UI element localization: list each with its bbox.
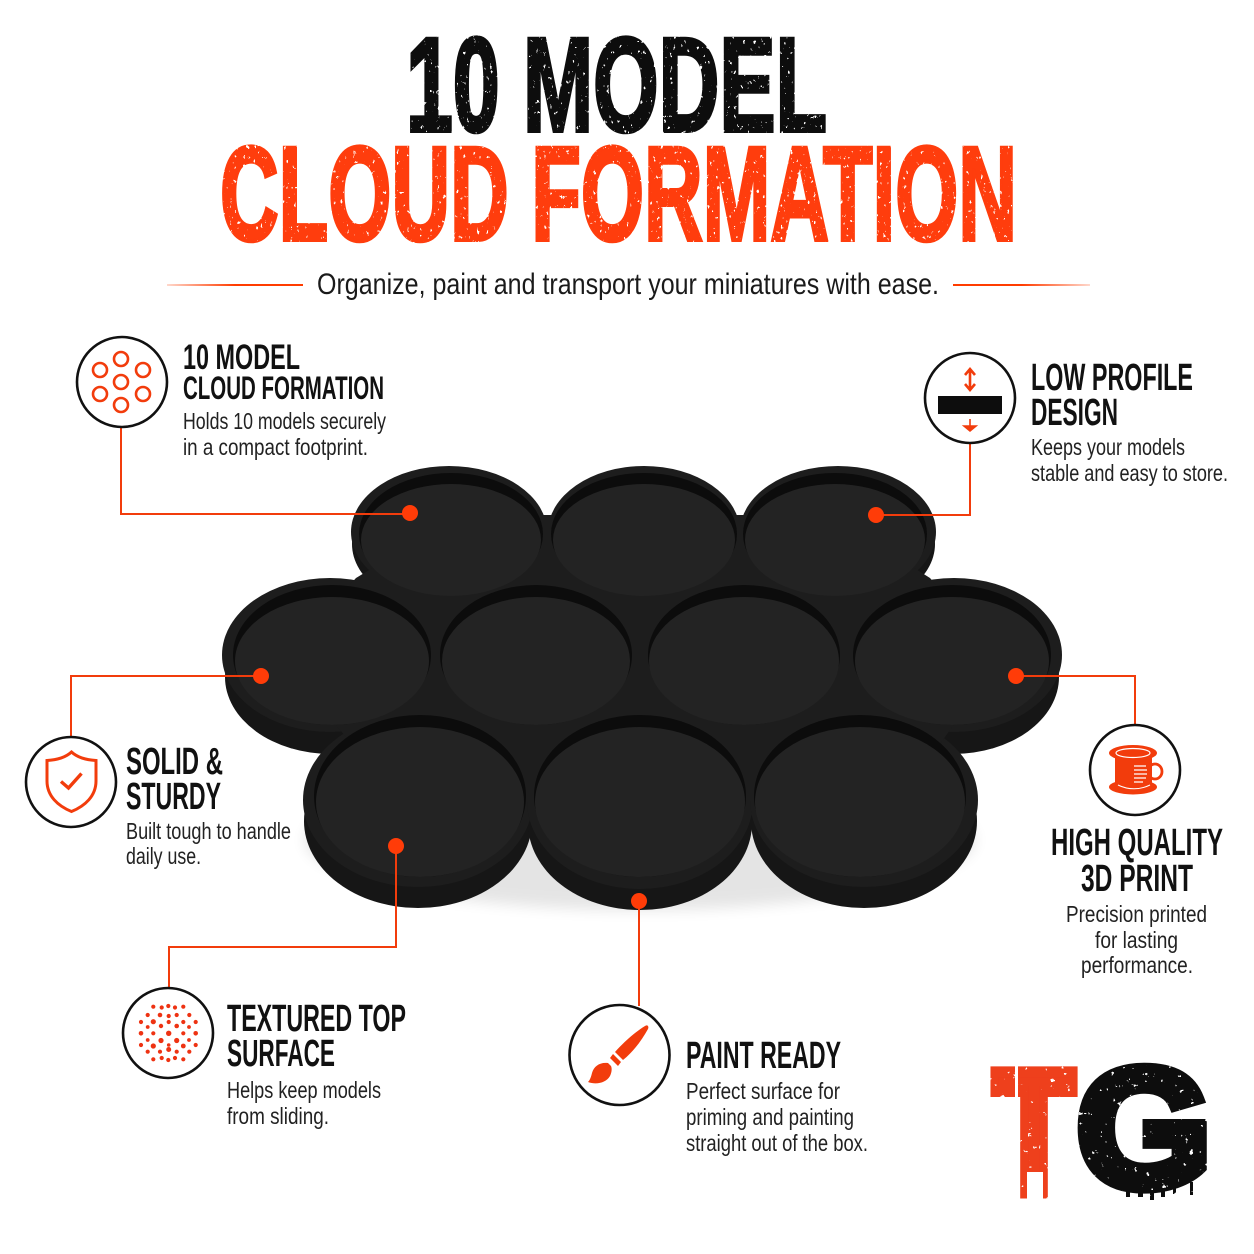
logo letter G: G xyxy=(1077,1035,1211,1222)
description: priming and painting xyxy=(686,1104,854,1130)
description xyxy=(227,1077,381,1129)
feature: 10 model cloud formation xyxy=(77,337,386,460)
heading xyxy=(1031,357,1193,434)
icon: shield with check xyxy=(26,737,116,827)
textured floors xyxy=(235,484,1049,877)
logo letter T: T xyxy=(993,1034,1075,1231)
callout lines and dots xyxy=(71,428,1135,1006)
description: straight out of the box. xyxy=(686,1130,868,1156)
heading: TEXTURED TOP xyxy=(227,998,406,1040)
heading xyxy=(183,338,384,406)
tray side walls xyxy=(225,478,1059,910)
description: Built tough to handle xyxy=(126,818,291,844)
heading: DESIGN xyxy=(1031,392,1118,434)
heading: PAINT READY xyxy=(686,1035,841,1077)
heading: SURFACE xyxy=(227,1033,335,1075)
description: Helps keep models xyxy=(227,1077,381,1103)
heading xyxy=(227,998,406,1075)
icon: ten rings xyxy=(77,337,167,427)
icon: dot texture xyxy=(123,988,213,1078)
feature: paint ready xyxy=(570,1005,868,1156)
description: in a compact footprint. xyxy=(183,434,368,460)
description xyxy=(1066,901,1207,978)
logo: TG xyxy=(993,1034,1211,1231)
heading: 3D PRINT xyxy=(1081,858,1193,900)
feature: textured top surface xyxy=(123,988,406,1129)
icon: filament spool xyxy=(1090,725,1180,815)
subtitle: Organize, paint and transport your miniatures with ease. xyxy=(317,268,939,301)
description: Keeps your models xyxy=(1031,434,1185,460)
description: Perfect surface for xyxy=(686,1078,840,1104)
heading xyxy=(126,741,223,818)
tray top surface xyxy=(222,466,1062,889)
heading: 10 MODEL xyxy=(183,338,300,377)
heading: SOLID & xyxy=(126,741,223,783)
icon: paint brush xyxy=(570,1005,670,1105)
description xyxy=(126,818,291,869)
feature: solid and sturdy xyxy=(26,737,291,869)
icon: height arrows and bar xyxy=(925,353,1015,443)
heading: CLOUD FORMATION xyxy=(183,370,384,406)
description xyxy=(686,1078,868,1156)
description: performance. xyxy=(1081,952,1193,978)
title xyxy=(220,11,1017,269)
recessed walls xyxy=(233,473,1051,877)
description: from sliding. xyxy=(227,1103,329,1129)
heading: STURDY xyxy=(126,776,221,818)
heading xyxy=(1051,822,1223,900)
description: Precision printed xyxy=(1066,901,1207,927)
feature: high quality 3D print xyxy=(1051,725,1223,978)
product: ten-model movement tray xyxy=(222,466,1062,910)
description: for lasting xyxy=(1095,927,1178,953)
description: daily use. xyxy=(126,843,201,869)
description xyxy=(1031,434,1228,486)
feature: low profile design xyxy=(925,353,1228,486)
description xyxy=(183,408,386,460)
title line: 10 MODEL: 10 MODEL xyxy=(406,11,827,160)
description: Holds 10 models securely xyxy=(183,408,386,434)
